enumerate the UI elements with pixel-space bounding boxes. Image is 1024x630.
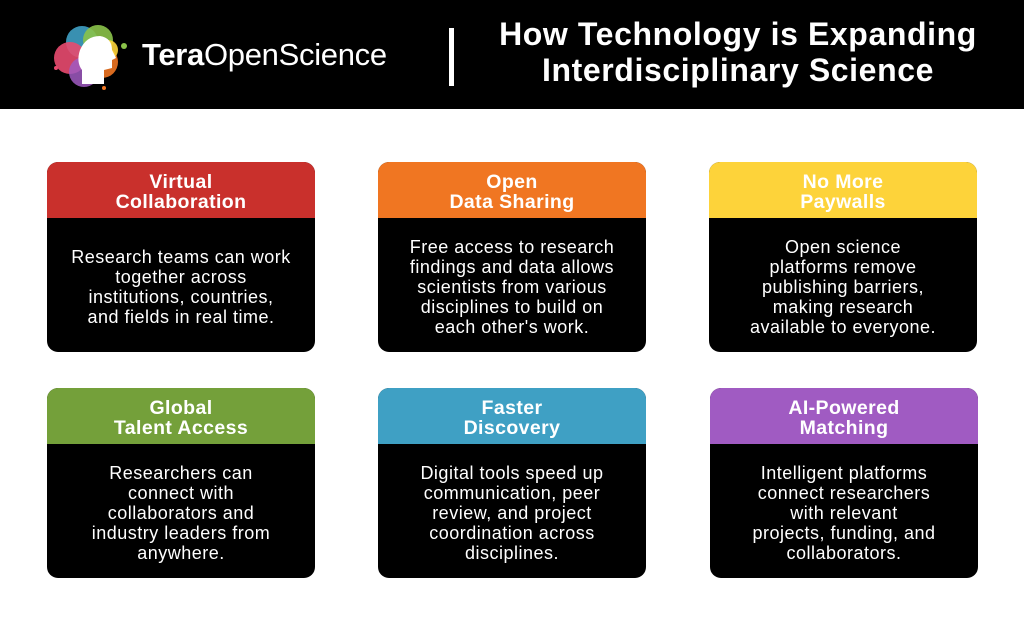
card: open data sharing: disciplines to build on xyxy=(421,297,603,317)
card: virtual collaboration: together across xyxy=(115,267,247,287)
card: global talent access: collaborators and xyxy=(108,503,254,523)
card: ai-powered matching xyxy=(710,388,978,578)
title xyxy=(499,16,977,88)
card: virtual collaboration: and fields in real time. xyxy=(87,307,275,327)
divider xyxy=(449,28,454,86)
card: virtual collaboration: Virtual xyxy=(149,171,213,193)
card: ai-powered matching: collaborators. xyxy=(786,543,902,563)
card: no more paywalls: Paywalls xyxy=(800,191,886,213)
card: no more paywalls: Open science xyxy=(785,237,901,257)
card: virtual collaboration xyxy=(47,162,315,352)
card: open data sharing xyxy=(378,162,646,352)
card: global talent access: anywhere. xyxy=(137,543,225,563)
card: no more paywalls: publishing barriers, xyxy=(762,277,924,297)
card: global talent access: Talent Access xyxy=(114,417,248,439)
card: global talent access xyxy=(47,388,315,578)
card: no more paywalls: No More xyxy=(803,171,883,193)
card: open data sharing: Open xyxy=(486,171,538,193)
card: faster discovery: review, and project xyxy=(432,503,592,523)
card: open data sharing: scientists from various xyxy=(417,277,607,297)
header bar xyxy=(0,0,1024,109)
logo text: TeraOpenScience xyxy=(142,37,387,72)
card: faster discovery: communication, peer xyxy=(424,483,600,503)
card: ai-powered matching: with relevant xyxy=(790,503,898,523)
card: faster discovery xyxy=(378,388,646,578)
title: Interdisciplinary Science xyxy=(542,52,934,88)
card: virtual collaboration: Research teams can work xyxy=(71,247,291,267)
card: virtual collaboration: institutions, countries, xyxy=(88,287,274,307)
card: no more paywalls: platforms remove xyxy=(769,257,917,277)
card: ai-powered matching: Matching xyxy=(800,417,888,439)
card: ai-powered matching: Intelligent platforms xyxy=(761,463,927,483)
card: no more paywalls: making research xyxy=(773,297,913,317)
card: faster discovery: coordination across xyxy=(429,523,595,543)
card: ai-powered matching: connect researchers xyxy=(758,483,930,503)
card: ai-powered matching: AI-Powered xyxy=(788,397,900,419)
logo icon xyxy=(54,25,127,90)
card: global talent access: connect with xyxy=(128,483,234,503)
card: faster discovery: disciplines. xyxy=(465,543,559,563)
card: open data sharing: findings and data allows xyxy=(410,257,614,277)
card: open data sharing: Free access to research xyxy=(410,237,614,257)
card: virtual collaboration: Collaboration xyxy=(116,191,246,213)
card: open data sharing: each other's work. xyxy=(435,317,589,337)
card: faster discovery: Faster xyxy=(482,397,542,419)
card: open data sharing: Data Sharing xyxy=(449,191,575,213)
card: global talent access: industry leaders from xyxy=(92,523,270,543)
card: no more paywalls: available to everyone. xyxy=(750,317,936,337)
card: no more paywalls xyxy=(709,162,977,352)
card: faster discovery: Discovery xyxy=(464,417,560,439)
card: global talent access: Global xyxy=(149,397,213,419)
card: ai-powered matching: projects, funding, and xyxy=(752,523,936,543)
title: How Technology is Expanding xyxy=(499,16,977,52)
card: faster discovery: Digital tools speed up xyxy=(420,463,604,483)
card: global talent access: Researchers can xyxy=(109,463,253,483)
